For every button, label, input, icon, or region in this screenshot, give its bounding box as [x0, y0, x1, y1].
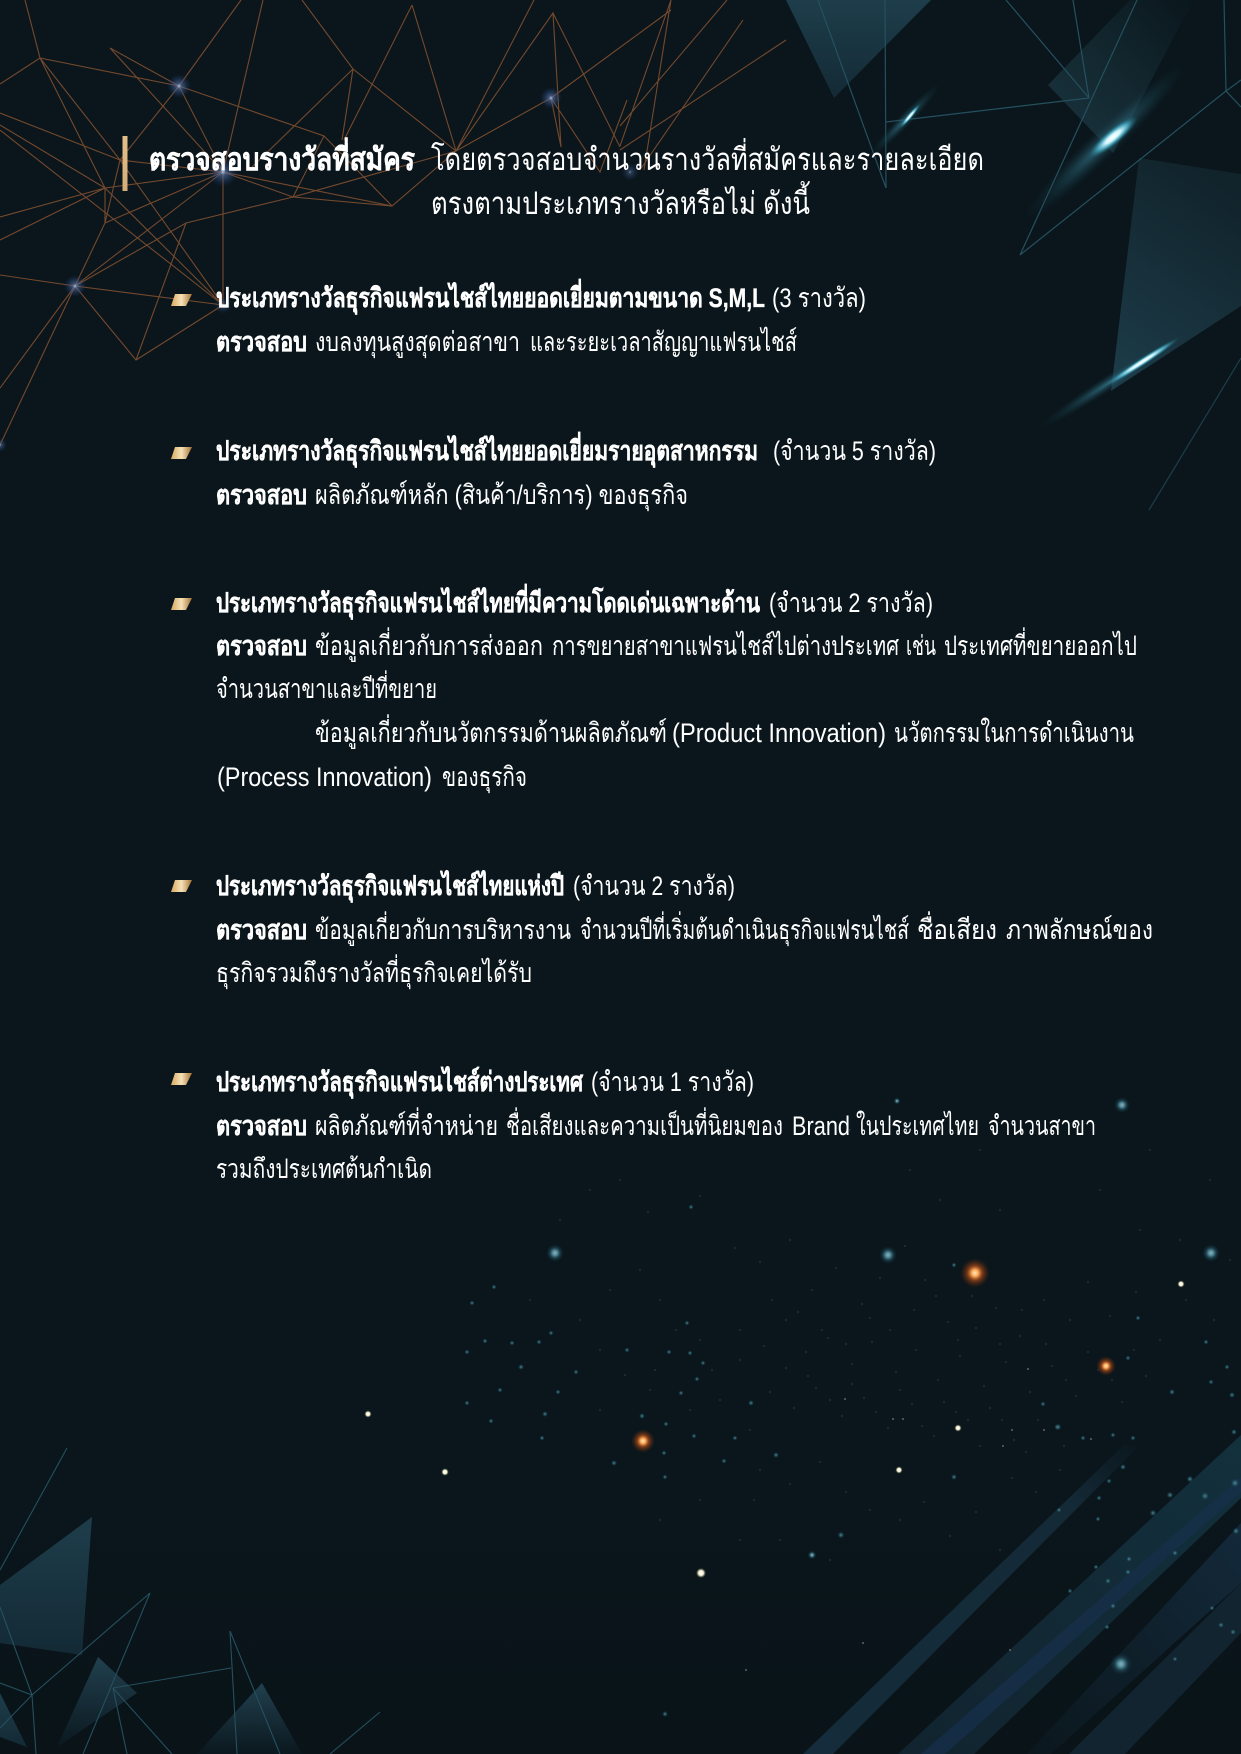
- item 3 detail: (Product Innovation): [672, 718, 886, 748]
- item 5 detail: ผลิตภัณฑ์ที่จำหน่าย: [315, 1107, 498, 1141]
- item 4 detail: ภาพลักษณ์ของ: [1006, 914, 1153, 945]
- item 4 title: (จำนวน 2 รางวัล): [573, 871, 735, 901]
- polygon decoration top right: [786, 0, 1241, 510]
- item 5 detail: [216, 1107, 1096, 1184]
- item 3 detail: ของธุรกิจ: [442, 762, 527, 794]
- item 1 detail: ตรวจสอบ: [216, 327, 307, 357]
- item 4 detail: ตรวจสอบ: [216, 915, 307, 945]
- item 1 detail: [216, 326, 797, 359]
- diagonal stripes bottom right: [803, 1435, 1241, 1754]
- item 2 detail: ตรวจสอบ: [216, 480, 307, 510]
- item 4 detail: [216, 911, 1153, 990]
- item 1 title: (3 รางวัล): [772, 283, 866, 313]
- item 3 title: (จำนวน 2 รางวัล): [769, 588, 933, 618]
- item 5 title: (จำนวน 1 รางวัล): [591, 1067, 754, 1097]
- small white stars: [746, 1369, 1091, 1670]
- item 3 detail: (Process Innovation): [217, 762, 432, 792]
- item 3: outstanding award: [171, 583, 1137, 794]
- item 1 detail: งบลงทุนสูงสุดต่อสาขา: [315, 327, 520, 359]
- item 5 detail: ในประเทศไทย: [856, 1110, 979, 1141]
- item 5: foreign franchise award: [171, 1066, 1096, 1184]
- item 2 detail: [216, 479, 688, 512]
- bullet 5: [171, 1073, 192, 1085]
- heading: โดยตรวจสอบจำนวนรางวัลที่สมัครและรายละเอียด: [431, 138, 984, 177]
- orange stars: [631, 1258, 1116, 1453]
- item 3 detail: ข้อมูลเกี่ยวกับการส่งออก: [315, 627, 543, 662]
- teal stars: [464, 1204, 1239, 1717]
- item 4 title: ประเภทรางวัลธุรกิจแฟรนไชส์ไทยแห่งปี: [216, 870, 564, 903]
- tiny stars: [530, 1130, 1230, 1560]
- item 5 detail: ตรวจสอบ: [216, 1111, 307, 1141]
- item 3 detail: การขยายสาขาแฟรนไชส์ไปต่างประเทศ: [552, 630, 899, 661]
- item 2 title: (จำนวน 5 รางวัล): [773, 436, 936, 466]
- item 3 detail: ตรวจสอบ: [216, 631, 307, 661]
- star field: [364, 1097, 1239, 1717]
- item 3 title: ประเภทรางวัลธุรกิจแฟรนไชส์ไทยที่มีความโดดเด่นเฉพาะด้าน: [216, 583, 760, 620]
- light streaks: [865, 53, 1196, 435]
- item 2 detail: ผลิตภัณฑ์หลัก (สินค้า/บริการ) ของธุรกิจ: [315, 479, 688, 512]
- item 2: industry award: [171, 431, 936, 512]
- item 3 detail: ข้อมูลเกี่ยวกับนวัตกรรมด้านผลิตภัณฑ์: [315, 714, 667, 749]
- item 4 detail: ชื่อเสียง: [917, 911, 997, 945]
- item 5 detail: Brand: [792, 1111, 850, 1141]
- network glow nodes: [0, 74, 639, 452]
- heading: ตรวจสอบรางวัลที่สมัคร: [149, 137, 415, 177]
- bullet 3: [171, 598, 192, 610]
- heading: [149, 137, 984, 221]
- heading bar: [122, 136, 128, 191]
- item 5 title: ประเภทรางวัลธุรกิจแฟรนไชส์ต่างประเทศ: [216, 1066, 584, 1099]
- item 3 detail: [216, 627, 1137, 794]
- item 4: award of the year: [171, 870, 1153, 990]
- polygon decoration bottom left: [0, 1448, 380, 1754]
- bullet 2: [171, 447, 192, 459]
- item 3 detail: จำนวนสาขาและปีที่ขยาย: [216, 670, 437, 704]
- item 4 detail: ข้อมูลเกี่ยวกับการบริหารงาน: [315, 911, 571, 946]
- item 1 title: ประเภทรางวัลธุรกิจแฟรนไชส์ไทยยอดเยี่ยมตามขนาด S,M,L: [216, 278, 765, 315]
- item 4 detail: จำนวนปีที่เริ่มต้นดำเนินธุรกิจแฟรนไชส์: [580, 911, 909, 947]
- large teal stars: [546, 1097, 1220, 1675]
- bullet 4: [171, 880, 192, 892]
- item 3 detail: ประเทศที่ขยายออกไป: [944, 627, 1137, 661]
- bullet 1: [171, 294, 192, 306]
- item 5 detail: ชื่อเสียงและความเป็นที่นิยมของ: [506, 1107, 783, 1141]
- item 3 detail: นวัตกรรมในการดำเนินงาน: [894, 717, 1134, 748]
- item 2 title: ประเภทรางวัลธุรกิจแฟรนไชส์ไทยยอดเยี่ยมรายอุตสาหกรรม: [216, 431, 758, 468]
- item 3 detail: เช่น: [906, 631, 936, 661]
- item 5 detail: รวมถึงประเทศต้นกำเนิด: [216, 1154, 432, 1184]
- heading: ตรงตามประเภทรางวัลหรือไม่ ดังนี้: [431, 181, 810, 221]
- item 1: size award: [171, 278, 866, 359]
- network lines top left: [0, 0, 786, 445]
- item 1 detail: และระยะเวลาสัญญาแฟรนไชส์: [530, 326, 797, 357]
- white stars: [364, 1280, 1185, 1578]
- item 4 detail: ธุรกิจรวมถึงรางวัลที่ธุรกิจเคยได้รับ: [216, 954, 532, 990]
- item 5 detail: จำนวนสาขา: [988, 1111, 1096, 1141]
